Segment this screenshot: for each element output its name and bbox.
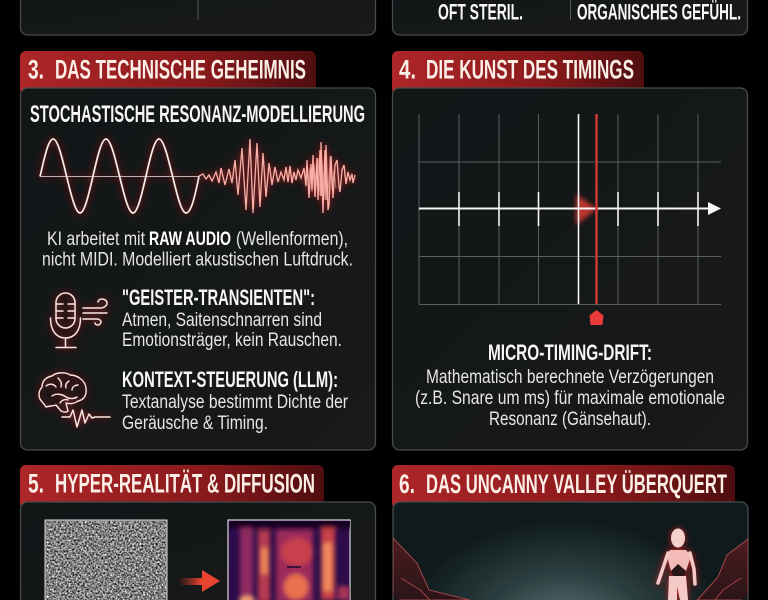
heading tab 5 <box>20 465 324 509</box>
text: Geister-Transienten: Emotionsträger, kein Rauschen. <box>122 330 342 351</box>
text: Kontext-Steuerung: Textanalyse bestimmt Dichte der <box>122 392 349 413</box>
section 6: das Uncanny Valley ueberquert <box>392 465 748 600</box>
left rock <box>393 538 470 600</box>
heading tab 5: HYPER-REALITÄT & DIFFUSION <box>55 468 315 498</box>
heading tab 4: 4. <box>399 54 416 84</box>
text: Micro-Timing-Drift: Resonanz (Gänsehaut). <box>489 409 651 430</box>
panel 6 body <box>393 502 748 600</box>
subheading: STOCHASTISCHE RESONANZ-MODELLIERUNG <box>30 101 365 128</box>
body text <box>42 229 353 270</box>
arrow: noise to spectrogram <box>178 570 220 592</box>
heading tab 4: DIE KUNST DES TIMINGS <box>426 54 634 84</box>
text: Geister-Transienten <box>122 285 342 351</box>
section 5: Hyper-Realität und Diffusion <box>20 465 376 600</box>
panel 5 body <box>20 502 376 600</box>
section 4: die Kunst des Timings <box>392 51 748 450</box>
body text: (Wellenformen), <box>236 229 348 250</box>
text: Kontext-Steuerung <box>122 367 349 434</box>
panel: section 1 remainder <box>20 0 376 35</box>
body text: nicht MIDI. Modelliert akustischen Luftdruck. <box>42 250 353 270</box>
heading tab 3: DAS TECHNISCHE GEHEIMNIS <box>55 54 306 84</box>
panel: section 2 remainder: OFT STERIL. <box>438 0 523 24</box>
timing grid chart <box>419 114 721 325</box>
section 3: das technische Geheimnis <box>20 51 376 450</box>
right rock <box>697 539 748 600</box>
heading tab 6 <box>392 465 735 509</box>
text: Micro-Timing-Drift: MICRO-TIMING-DRIFT: <box>488 340 652 365</box>
text: Geister-Transienten: "GEISTER-TRANSIENTEN": <box>122 285 315 310</box>
text: Kontext-Steuerung: KONTEXT-STEUERUNG (LLM): <box>122 367 338 392</box>
text: Micro-Timing-Drift <box>415 340 725 430</box>
panel: section 2 remainder <box>392 0 748 35</box>
heading tab 4 <box>392 51 644 95</box>
panel 3 body <box>20 88 376 450</box>
heading tab 6: 6. <box>399 469 415 499</box>
heading tab 5: 5. <box>28 468 44 498</box>
valley illustration <box>393 528 748 600</box>
marker: red pentagon <box>590 310 604 325</box>
body text: RAW AUDIO <box>149 229 231 250</box>
noise image <box>45 520 167 600</box>
heading tab 3 <box>20 51 316 95</box>
body text: KI arbeitet mit <box>47 229 146 250</box>
waveform chart <box>40 139 355 213</box>
icon: robot <box>658 528 695 600</box>
heading tab 3: 3. <box>28 54 44 84</box>
text: Kontext-Steuerung: Geräusche & Timing. <box>122 413 268 434</box>
panel 4 body <box>392 88 748 450</box>
spectrogram image <box>225 517 355 600</box>
text: Geister-Transienten: Atmen, Saitenschnarren sind <box>122 310 322 331</box>
icon: microphone with breath <box>50 293 107 348</box>
icon: brain with pulse <box>39 373 110 427</box>
